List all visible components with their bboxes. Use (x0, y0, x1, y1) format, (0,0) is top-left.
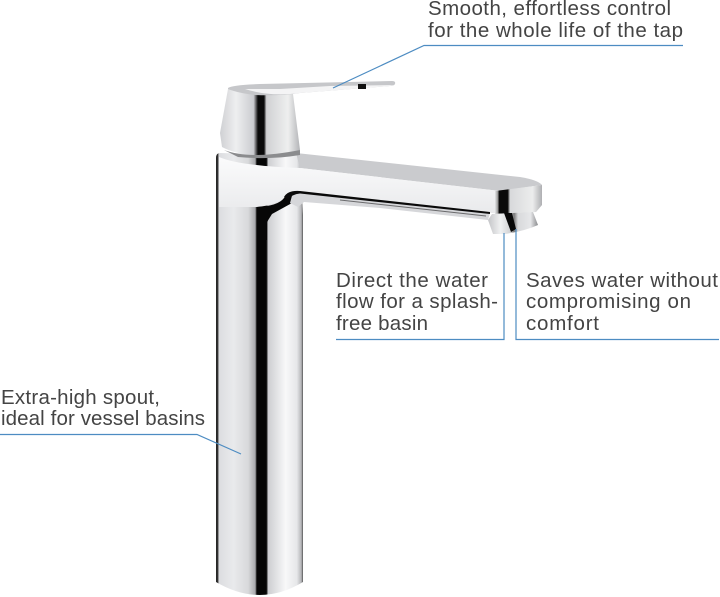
leader line (516, 229, 719, 340)
text: Extra-high spout, (1, 386, 160, 409)
column shading under spout (257, 193, 296, 240)
leader line (0, 434, 241, 454)
text (428, 0, 683, 42)
text: comfort (526, 312, 599, 335)
spout front surface (219, 157, 542, 213)
text: compromising on (526, 290, 691, 313)
text (1, 386, 205, 430)
spout underside dark line (284, 191, 490, 214)
handle base ring (224, 150, 300, 158)
callout: lever control (333, 0, 683, 88)
text: for the whole life of the tap (428, 19, 683, 42)
aerator (488, 212, 538, 234)
text: Saves water without (526, 269, 718, 292)
text (526, 269, 718, 335)
lever (228, 81, 395, 95)
leader line (333, 46, 683, 88)
tap body column (216, 153, 303, 595)
text: Direct the water (336, 269, 488, 292)
callout: extra-high spout (0, 386, 241, 454)
leader line (336, 233, 504, 340)
aerator dark stripe (504, 213, 516, 232)
callout: water saving (516, 229, 719, 340)
text: ideal for vessel basins (1, 407, 205, 430)
spout end highlight (495, 185, 542, 214)
text: flow for a splash- (336, 290, 498, 313)
spout underside strip (290, 192, 490, 220)
tap illustration (216, 81, 542, 595)
text: free basin (336, 312, 428, 335)
spout top surface (296, 153, 542, 191)
callout: water direction (336, 233, 504, 340)
text (336, 269, 498, 335)
handle body (220, 89, 300, 156)
